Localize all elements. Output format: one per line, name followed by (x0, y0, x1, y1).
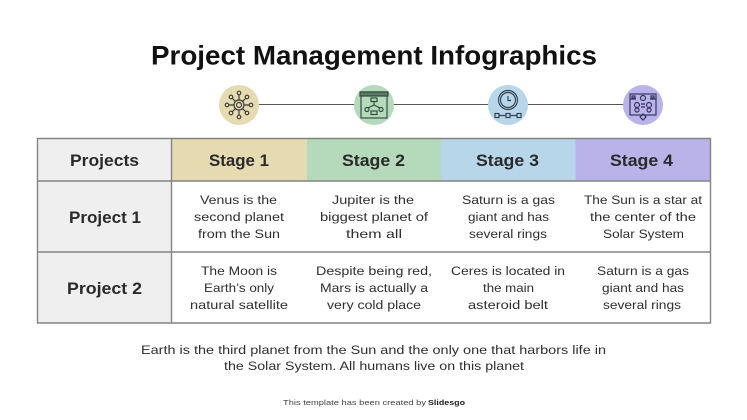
cell: project 2 stage 3: asteroid belt (468, 298, 549, 312)
stage icon timeline (219, 85, 663, 125)
cell: project 1 stage 1 (194, 193, 285, 241)
cell: project 2 stage 2: Mars is actually a (320, 281, 428, 295)
cell: project 1 stage 2: Jupiter is the (332, 193, 414, 207)
cell: project 2 stage 3: Ceres is located in (451, 264, 565, 278)
cell: project 1 stage 2: biggest planet of (320, 210, 429, 224)
cell: project 1 stage 1: from the Sun (198, 227, 280, 241)
credit line: Slidesgo (428, 398, 465, 407)
cell: project 2 stage 1: Earth’s only (204, 281, 275, 295)
header: stage 4: Stage 4 (610, 151, 674, 170)
cell: project 2 stage 4 (597, 264, 689, 312)
cell: project 2 stage 3: the main (483, 281, 534, 295)
cell: project 2 stage 4: Saturn is a gas (597, 264, 689, 278)
cell: project 2 stage 2: Despite being red, (316, 264, 432, 278)
cell: project 1 stage 4: The Sun is a star at (584, 193, 703, 207)
header: stage 3: Stage 3 (476, 151, 539, 170)
icon: network hub (219, 85, 259, 125)
left column shading (38, 138, 172, 323)
cell: project 1 stage 2 (320, 193, 429, 241)
row label: project 2: Project 2 (67, 279, 142, 298)
icon: flowchart window (354, 85, 394, 125)
credit line (283, 398, 465, 407)
cell: project 2 stage 1: The Moon is (201, 264, 277, 278)
cell: project 2 stage 4: several rings (603, 298, 681, 312)
table grid (38, 138, 710, 323)
row label: project 1: Project 1 (69, 208, 141, 227)
cell: project 1 stage 1: Venus is the (200, 193, 277, 207)
credit line: This template has been created by (283, 398, 426, 407)
cell: project 1 stage 3: giant and has (468, 210, 549, 224)
cell: project 1 stage 1: second planet (194, 210, 285, 224)
cell: project 2 stage 3 (451, 264, 565, 312)
title: Project Management Infographics (151, 40, 597, 70)
cell: project 1 stage 2: them all (346, 227, 402, 241)
stage header fills (172, 139, 307, 181)
cell: project 1 stage 3: Saturn is a gas (462, 193, 555, 207)
connector line (239, 104, 643, 106)
icon: clock and process (488, 85, 528, 125)
description text (141, 343, 606, 373)
cell: project 1 stage 3 (462, 193, 555, 241)
description text: Earth is the third planet from the Sun and the only one that harbors life in (141, 343, 606, 357)
cell: project 2 stage 2: very cold place (327, 298, 421, 312)
cell: project 1 stage 3: several rings (469, 227, 547, 241)
cell: project 2 stage 1: natural satellite (190, 298, 288, 312)
cell: project 1 stage 4: Solar System (603, 227, 684, 241)
table (38, 138, 710, 323)
cell: project 1 stage 4: the center of the (590, 210, 696, 224)
description text: the Solar System. All humans live on this planet (224, 359, 525, 373)
header: stage 1: Stage 1 (209, 151, 269, 170)
cell: project 2 stage 2 (316, 264, 432, 312)
header: projects: Projects (70, 151, 139, 170)
icon: diagram window (623, 85, 663, 125)
header: stage 2: Stage 2 (342, 151, 405, 170)
cell: project 2 stage 1 (190, 264, 288, 312)
cell: project 1 stage 4 (584, 193, 703, 241)
cell: project 2 stage 4: giant and has (602, 281, 684, 295)
